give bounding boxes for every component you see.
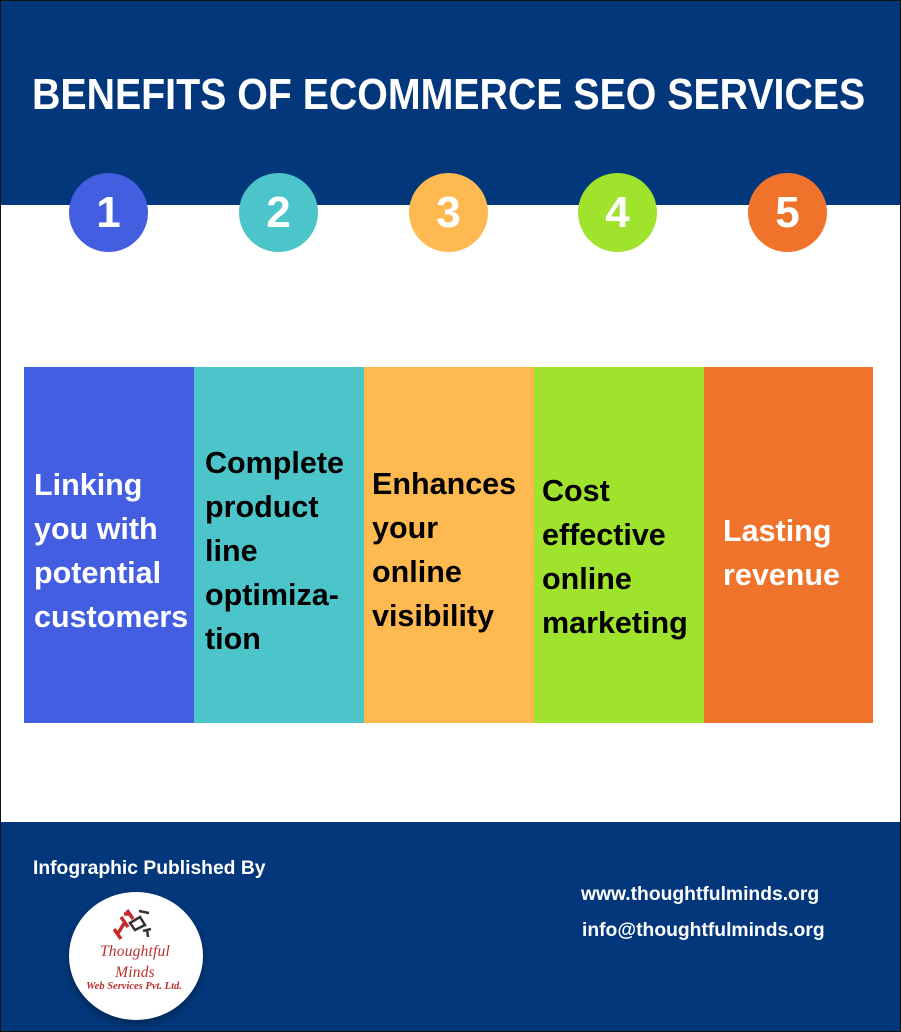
number circle 5: [748, 173, 827, 252]
panel 5: lasting revenue: [704, 367, 873, 723]
panel 4 text: Cost: [542, 474, 610, 508]
panel 2 text: line: [205, 534, 258, 568]
panel 2 text: product: [205, 490, 319, 524]
panel 2: product line optimization: [194, 367, 364, 723]
panel 5 text: Lasting: [723, 514, 831, 548]
panel 1 text: [34, 468, 188, 634]
panel 3 text: [372, 467, 516, 633]
panel 4 text: marketing: [542, 606, 688, 640]
panel 1 text: Linking: [34, 468, 142, 502]
number circle 3: [409, 173, 488, 252]
logo wordmark: Minds: [115, 964, 155, 981]
panel 2 text: Complete: [205, 446, 344, 480]
number circle 5: 5: [775, 188, 800, 237]
logo wordmark: Thoughtful: [100, 943, 170, 960]
panel 1 text: customers: [34, 600, 188, 634]
header band: [1, 1, 900, 205]
logo badge: [69, 892, 203, 1020]
number circle 4: [578, 173, 657, 252]
title: BENEFITS OF ECOMMERCE SEO SERVICES: [32, 70, 865, 119]
logo wordmark: [100, 943, 170, 981]
panel 2 text: tion: [205, 622, 261, 656]
panel 5 text: revenue: [723, 558, 840, 592]
number circle 1: [69, 173, 148, 252]
panel 2 text: [205, 446, 344, 656]
number circle 2: [239, 173, 318, 252]
email: info@thoughtfulminds.org: [582, 920, 825, 941]
number circle 4: 4: [605, 188, 630, 237]
panel 1: potential customers: [24, 367, 194, 723]
panel 3 text: online: [372, 555, 462, 589]
panel 4: cost effective marketing: [534, 367, 704, 723]
panel 1 text: potential: [34, 556, 161, 590]
footer band: [1, 822, 900, 1031]
number circle 1: 1: [96, 188, 121, 237]
panel 5 text: [723, 514, 840, 592]
number circle 3: 3: [436, 188, 461, 237]
panel 3 text: Enhances: [372, 467, 516, 501]
panel 3: online visibility: [364, 367, 534, 723]
panel 2 text: optimiza-: [205, 578, 339, 612]
number circle 2: 2: [266, 188, 291, 237]
logo icon: [113, 909, 152, 940]
panel 3 text: your: [372, 511, 438, 545]
panel 3 text: visibility: [372, 599, 494, 633]
website: www.thoughtfulminds.org: [581, 884, 819, 905]
panel 4 text: [542, 474, 688, 640]
publisher label: Infographic Published By: [33, 858, 265, 879]
panel 1 text: you with: [34, 512, 158, 546]
panel 4 text: effective: [542, 518, 666, 552]
logo tagline: Web Services Pvt. Ltd.: [86, 981, 182, 992]
panel 4 text: online: [542, 562, 632, 596]
